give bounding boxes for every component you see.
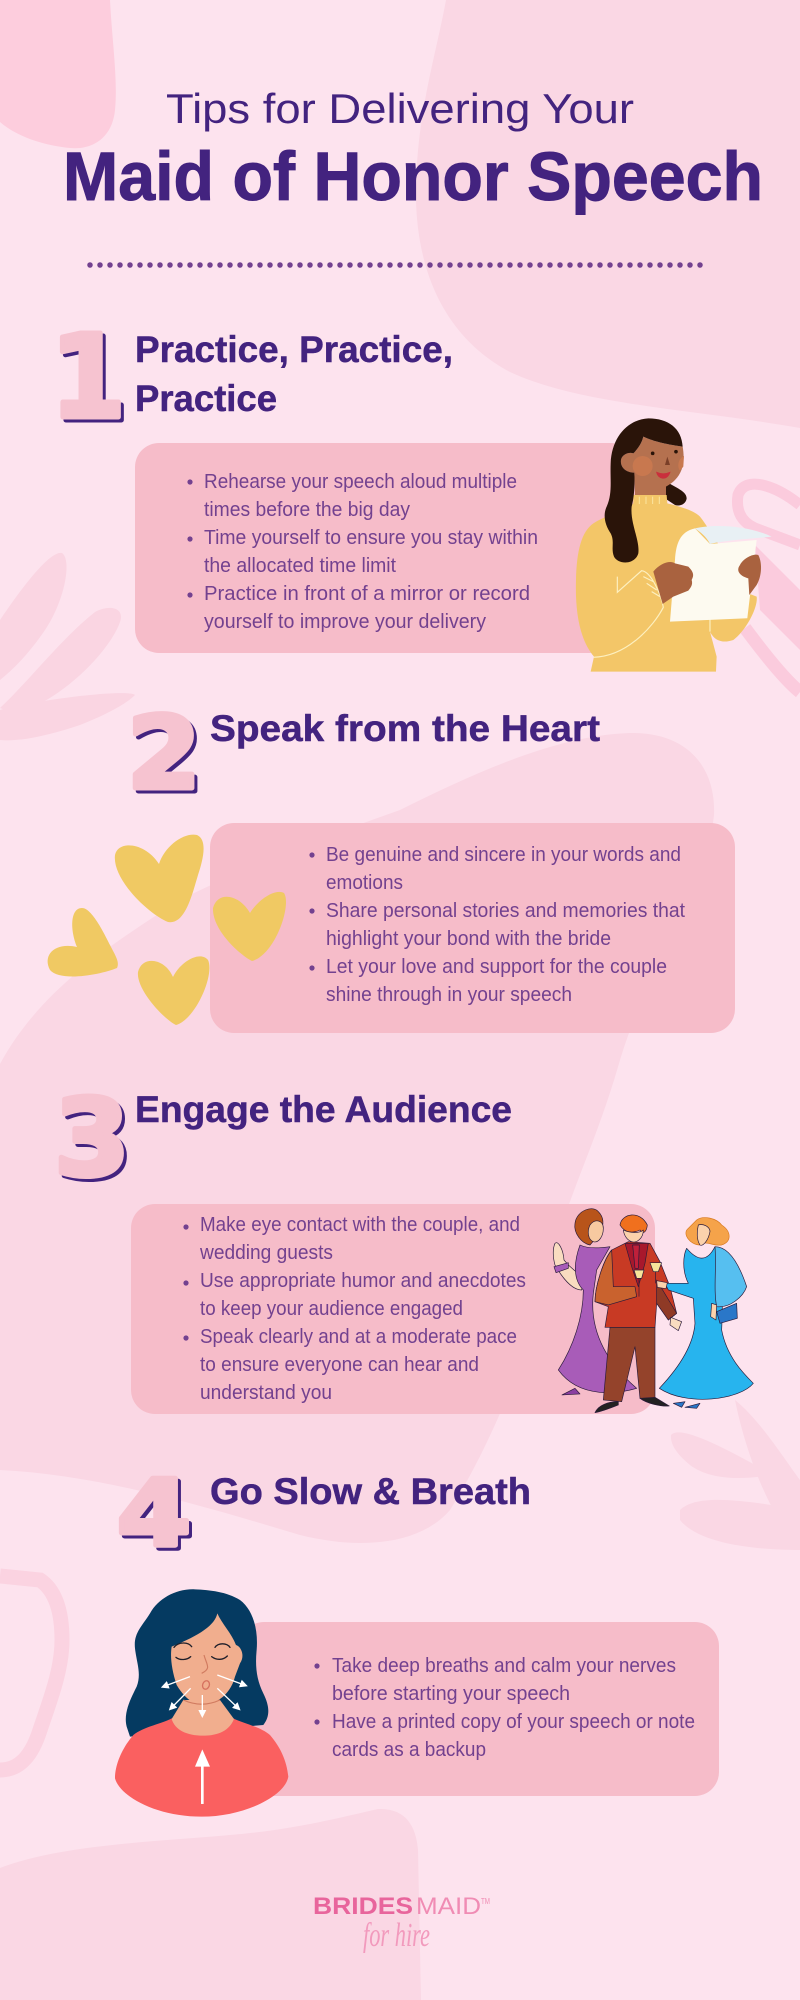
logo: MAID	[416, 1893, 481, 1920]
illustration: wedding guests	[553, 1209, 753, 1413]
tips 3: Speak clearly and at a moderate pace	[200, 1325, 517, 1348]
tips 3: to keep your audience engaged	[200, 1297, 463, 1320]
section 1: practice	[50, 311, 772, 672]
tips 2: shine through in your speech	[326, 983, 572, 1006]
tips 2: Share personal stories and memories that	[326, 899, 685, 922]
heading 3: Engage the Audience	[135, 1089, 512, 1130]
number 1: 1	[50, 311, 126, 445]
tips 3: to ensure everyone can hear and	[200, 1353, 479, 1376]
logo: BRIDES	[313, 1893, 413, 1920]
logo	[313, 1893, 490, 1954]
tips 3: Use appropriate humor and anecdotes	[200, 1269, 526, 1292]
illustration: woman reading paper	[576, 418, 772, 672]
number 2: 2	[130, 698, 204, 815]
tips 3	[183, 1213, 526, 1404]
tips 4: Have a printed copy of your speech or note	[332, 1710, 695, 1733]
tips 4: Take deep breaths and calm your nerves	[332, 1654, 676, 1677]
tips 1: times before the big day	[204, 498, 411, 521]
tips 4: cards as a backup	[332, 1738, 486, 1761]
tips 4: before starting your speech	[332, 1682, 570, 1705]
panel 1	[135, 443, 635, 653]
tips 1: Time yourself to ensure you stay within	[204, 526, 538, 549]
tips 3: understand you	[200, 1381, 332, 1404]
tips 1	[187, 470, 538, 633]
tips 2: Be genuine and sincere in your words and	[326, 843, 681, 866]
section 2: from the heart	[48, 695, 735, 1033]
number 1: 1	[53, 314, 129, 448]
title: Tips for Delivering Your	[166, 85, 634, 132]
tips 1: Rehearse your speech aloud multiple	[204, 470, 517, 493]
tips 1: Practice in front of a mirror or record	[204, 582, 530, 605]
panel 2	[210, 823, 735, 1033]
number 3: 3	[57, 1080, 133, 1203]
tips 2: highlight your bond with the bride	[326, 927, 611, 950]
logo: for hire	[363, 1917, 430, 1954]
heading 4: Go Slow & Breath	[210, 1471, 531, 1512]
arrow: breath in	[195, 1749, 210, 1804]
tips 4	[314, 1654, 695, 1761]
tips 3: Make eye contact with the couple, and	[200, 1213, 520, 1236]
tips 1: the allocated time limit	[204, 554, 396, 577]
number 2: 2	[127, 695, 201, 812]
hearts	[48, 835, 286, 1025]
tips 2: Let your love and support for the couple	[326, 955, 667, 978]
number 3: 3	[54, 1077, 130, 1200]
section 4: breath	[115, 1460, 719, 1817]
heading 2: Speak from the Heart	[210, 708, 600, 749]
panel 3	[131, 1204, 655, 1414]
heading 1: Practice, Practice,	[135, 329, 453, 370]
arrows: breath out	[163, 1675, 245, 1715]
panel 4	[240, 1622, 719, 1796]
heading 1: Practice	[135, 378, 277, 419]
number 4: 4	[120, 1463, 194, 1570]
illustration: woman breathing	[115, 1589, 288, 1817]
tips 2	[309, 843, 685, 1006]
number 4: 4	[117, 1460, 191, 1567]
title	[63, 85, 763, 215]
section 3: audience	[54, 1077, 753, 1414]
logo: TM	[481, 1897, 490, 1906]
title: Maid of Honor Speech	[63, 138, 763, 215]
tips 2: emotions	[326, 871, 403, 894]
tips 1: yourself to improve your delivery	[204, 610, 487, 633]
tips 3: wedding guests	[199, 1241, 333, 1264]
heading 1	[135, 329, 453, 419]
